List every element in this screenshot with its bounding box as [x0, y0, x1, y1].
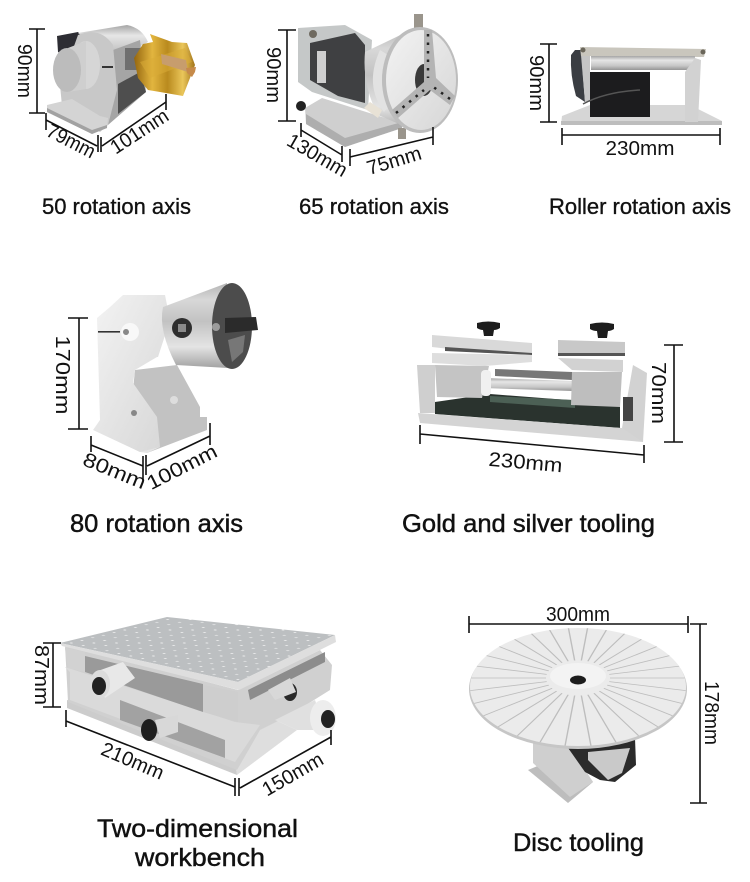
panel: 65 rotation axis	[262, 14, 458, 219]
caption: 50 rotation axis: 50 rotation axis	[42, 194, 191, 219]
dimension: height 90mm: 90mm	[13, 44, 35, 98]
dimension: height 90mm	[262, 30, 296, 121]
product: disc tooling device	[469, 628, 687, 803]
dimension: width 230mm: 230mm	[488, 449, 563, 477]
caption: Two-dimensional workbench	[97, 815, 298, 872]
panel: 80 rotation axis	[51, 283, 258, 538]
dimension: width 100mm	[143, 423, 221, 495]
caption: Two-dimensional workbench: Two-dimensional	[97, 815, 298, 843]
dimension: height 170mm: 170mm	[51, 336, 73, 414]
dimension: depth 79mm: 79mm	[43, 120, 99, 163]
product: 80 rotation axis device	[93, 283, 258, 453]
product: two-dimensional workbench device	[60, 617, 336, 775]
dimension: depth 210mm	[66, 710, 235, 796]
dimension: diameter 300mm: 300mm	[546, 604, 610, 626]
dimension: height 170mm	[51, 318, 88, 429]
dimension: width 230mm	[420, 425, 644, 477]
panel: 50 rotation axis	[13, 25, 196, 219]
caption: Two-dimensional workbench: workbench	[134, 844, 265, 872]
caption: Roller rotation axis: Roller rotation axis	[549, 194, 731, 219]
caption: 80 rotation axis: 80 rotation axis	[70, 510, 243, 538]
dimension: width 150mm: 150mm	[258, 749, 328, 801]
panel: Roller rotation axis	[525, 44, 731, 219]
dimension: depth 80mm: 80mm	[80, 449, 149, 494]
dimension: height 178mm	[690, 624, 722, 803]
dimension: depth 80mm	[80, 436, 149, 494]
dimension: height 70mm	[647, 345, 683, 442]
dimension: height 87mm	[30, 643, 61, 707]
dimension: height 90mm	[525, 44, 557, 122]
dimension: width 150mm	[239, 730, 331, 801]
product: gold and silver tooling device	[417, 322, 647, 442]
dimension: width 75mm	[350, 127, 433, 180]
caption: Gold and silver tooling: Gold and silver tooling	[402, 510, 655, 538]
dimension: width 230mm	[562, 128, 720, 160]
dimension: width 75mm: 75mm	[364, 143, 424, 180]
dimension: depth 130mm: 130mm	[283, 130, 351, 182]
dimension: width 100mm: 100mm	[143, 441, 221, 495]
panel: Two-dimensional workbench	[30, 617, 336, 872]
product: 65 rotation axis device	[296, 14, 458, 147]
panel: Disc tooling	[453, 604, 722, 857]
caption: 65 rotation axis: 65 rotation axis	[299, 194, 449, 219]
product: roller rotation axis device	[561, 47, 722, 125]
dimension: width 230mm: 230mm	[606, 138, 674, 160]
dimension: depth 210mm: 210mm	[98, 738, 167, 784]
dimension: height 90mm: 90mm	[262, 47, 284, 103]
dimension: diameter 300mm	[469, 604, 688, 633]
dimension: height 90mm	[13, 29, 45, 113]
caption: Disc tooling: Disc tooling	[513, 829, 644, 857]
dimension: height 178mm: 178mm	[700, 681, 722, 745]
panel: Gold and silver tooling	[402, 322, 683, 538]
dimension: height 70mm: 70mm	[647, 362, 669, 424]
product: 50 rotation axis device	[47, 25, 196, 134]
dimension: height 90mm: 90mm	[525, 55, 547, 111]
dimension: width 101mm: 101mm	[106, 105, 173, 159]
dimension: height 87mm: 87mm	[30, 645, 52, 705]
